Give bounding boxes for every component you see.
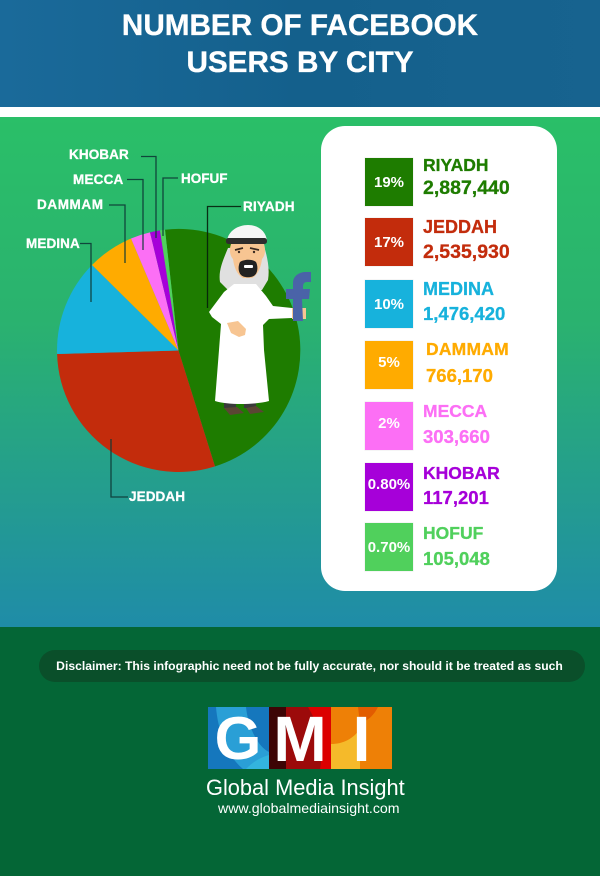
legend: Jeddah: 17%	[374, 234, 404, 251]
headdress back	[220, 246, 269, 290]
pie chart with callouts	[57, 156, 300, 498]
legend: Khobar: 117,201	[423, 487, 489, 508]
legend: Jeddah	[364, 217, 510, 266]
header band	[0, 0, 600, 107]
legend: Hofuf: 105,048	[423, 548, 490, 569]
headband	[226, 238, 267, 244]
legend: Mecca: MECCA	[423, 401, 487, 421]
label: Hofuf: HOFUF	[181, 171, 228, 186]
website: www.globalmediainsight.com	[218, 800, 400, 816]
legend: Khobar	[364, 462, 500, 512]
icon: facebook f	[286, 272, 311, 321]
brand name: Global Media Insight	[206, 775, 405, 800]
legend: Dammam: 5%	[378, 354, 400, 371]
label: Jeddah: JEDDAH	[129, 489, 185, 504]
beard	[239, 260, 257, 277]
disclaimer pill	[39, 650, 585, 682]
legend: Riyadh: RIYADH	[423, 155, 488, 175]
face	[230, 244, 265, 278]
legend: Khobar: KHOBAR	[423, 463, 500, 483]
head covering	[227, 225, 267, 241]
callout leader lines	[80, 156, 241, 497]
icon: man in thobe holding Facebook logo	[209, 225, 311, 415]
legend: Hofuf: 0.70%	[368, 539, 410, 556]
panel: legend card	[321, 126, 557, 591]
label: Dammam: DAMMAM	[37, 197, 104, 212]
pie slices	[57, 229, 300, 472]
label: Mecca: MECCA	[73, 172, 124, 187]
title: USERS BY CITY	[186, 46, 414, 78]
gripping hand	[292, 308, 306, 319]
legend: Khobar: 0.80%	[368, 476, 410, 493]
legend: Medina: 1,476,420	[423, 303, 505, 324]
label: Medina: MEDINA	[26, 236, 80, 251]
legend: Jeddah: 2,535,930	[423, 241, 510, 263]
robe	[209, 284, 292, 404]
forearm hand	[227, 321, 246, 337]
mouth	[244, 265, 253, 268]
pie labels	[26, 147, 295, 504]
legend: Hofuf: HOFUF	[423, 523, 483, 543]
eyes	[235, 248, 259, 250]
main gradient panel	[0, 117, 600, 627]
label: Khobar: KHOBAR	[69, 147, 129, 162]
legend: Riyadh	[364, 155, 510, 206]
legend: Riyadh: 2,887,440	[423, 177, 510, 199]
legend: Jeddah: JEDDAH	[423, 217, 497, 237]
legend: Hofuf	[364, 522, 490, 572]
legend: Dammam: 766,170	[426, 365, 493, 386]
logo: GMI	[208, 707, 392, 769]
legend: Dammam	[364, 339, 509, 390]
legend: Mecca: 303,660	[423, 426, 490, 447]
disclaimer pill: Disclaimer: This infographic need not be fully accurate, nor should it be treated as such	[56, 659, 563, 673]
legend: Mecca	[364, 401, 490, 450]
legend: Medina: 10%	[374, 296, 404, 313]
legend: Mecca: 2%	[378, 415, 400, 432]
label: Riyadh: RIYADH	[243, 199, 295, 214]
legend: Riyadh: 19%	[374, 174, 404, 191]
footer band	[0, 627, 600, 876]
legend: Medina: MEDINA	[423, 279, 494, 299]
legs and shoes	[224, 398, 236, 408]
legend: Dammam: DAMMAM	[426, 339, 509, 359]
title: NUMBER OF FACEBOOK	[122, 9, 478, 42]
title	[122, 9, 478, 78]
legend: Medina	[364, 279, 505, 328]
